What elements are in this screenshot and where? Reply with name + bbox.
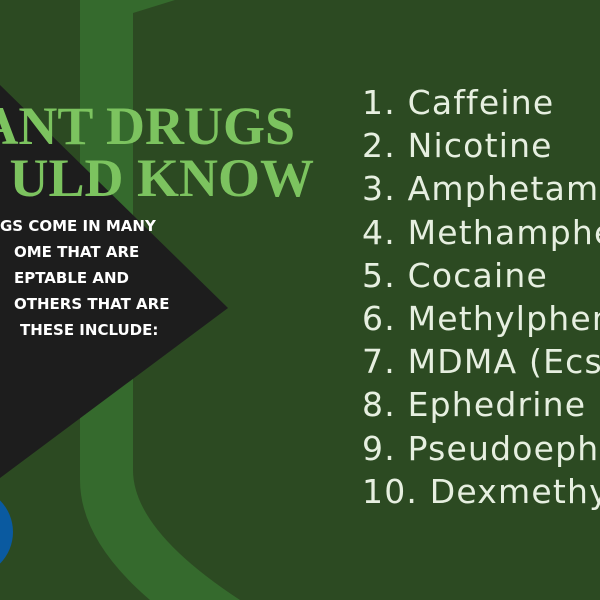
black triangle: [0, 85, 228, 478]
drug list: 1. Caffeine: [362, 83, 554, 122]
title: [0, 96, 314, 208]
drug list: 5. Cocaine: [362, 256, 548, 295]
intro text: OME THAT ARE: [14, 243, 139, 261]
intro text: EPTABLE AND: [14, 269, 129, 287]
intro text: OTHERS THAT ARE: [14, 295, 169, 313]
drug list: 8. Ephedrine: [362, 385, 586, 424]
intro text: [0, 217, 169, 339]
title: ULD KNOW: [9, 148, 314, 208]
intro text: THESE INCLUDE:: [20, 321, 158, 339]
drug list: [362, 83, 600, 511]
intro text: GS COME IN MANY: [0, 217, 156, 235]
drug list: 2. Nicotine: [362, 126, 553, 165]
blue circle: [0, 487, 13, 577]
